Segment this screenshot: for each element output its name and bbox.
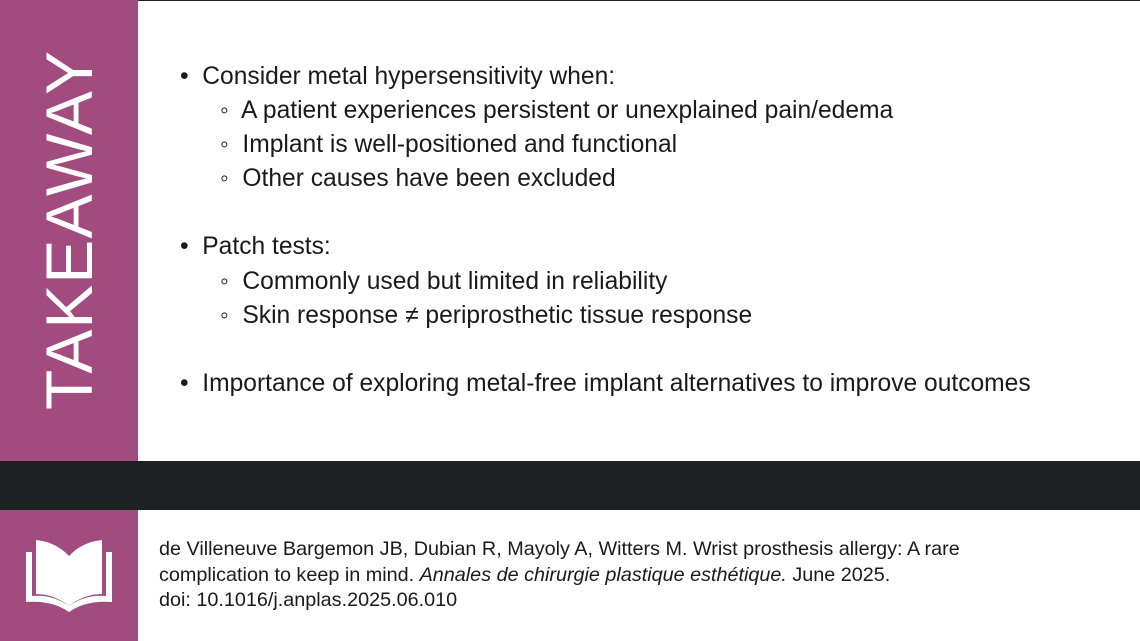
text block: citation: complication to keep in mind. Annales de chirurgie plastique esthétique. June 2025. xyxy=(159,564,890,586)
text block: takeaway bullets: ◦ Skin response ≠ periprosthetic tissue response xyxy=(220,302,752,329)
heading: TAKEAWAY vertical: TAKEAWAY xyxy=(32,50,106,410)
text block: takeaway bullets: • Importance of exploring metal-free implant alternatives to improve outcomes xyxy=(180,370,1031,397)
panel: reference icon box xyxy=(0,510,138,641)
text block: citation: doi: 10.1016/j.anplas.2025.06.010 xyxy=(159,589,457,611)
dark band xyxy=(0,461,1140,510)
text block: takeaway bullets: ◦ Commonly used but limited in reliability xyxy=(220,268,667,295)
text block: takeaway bullets: ◦ Implant is well-positioned and functional xyxy=(220,131,677,158)
icon: open book xyxy=(26,540,112,612)
panel: takeaway side bar xyxy=(0,0,138,461)
text block: citation: de Villeneuve Bargemon JB, Dubian R, Mayoly A, Witters M. Wrist prosthesis allergy: A rare xyxy=(159,538,960,560)
text block: takeaway bullets: ◦ A patient experiences persistent or unexplained pain/edema xyxy=(220,97,893,124)
text block: takeaway bullets: ◦ Other causes have been excluded xyxy=(220,165,616,192)
text block: takeaway bullets: • Patch tests: xyxy=(180,233,331,260)
text block: citation xyxy=(159,538,960,611)
text block: takeaway bullets: • Consider metal hypersensitivity when: xyxy=(180,63,615,90)
text block: takeaway bullets xyxy=(180,63,1031,397)
